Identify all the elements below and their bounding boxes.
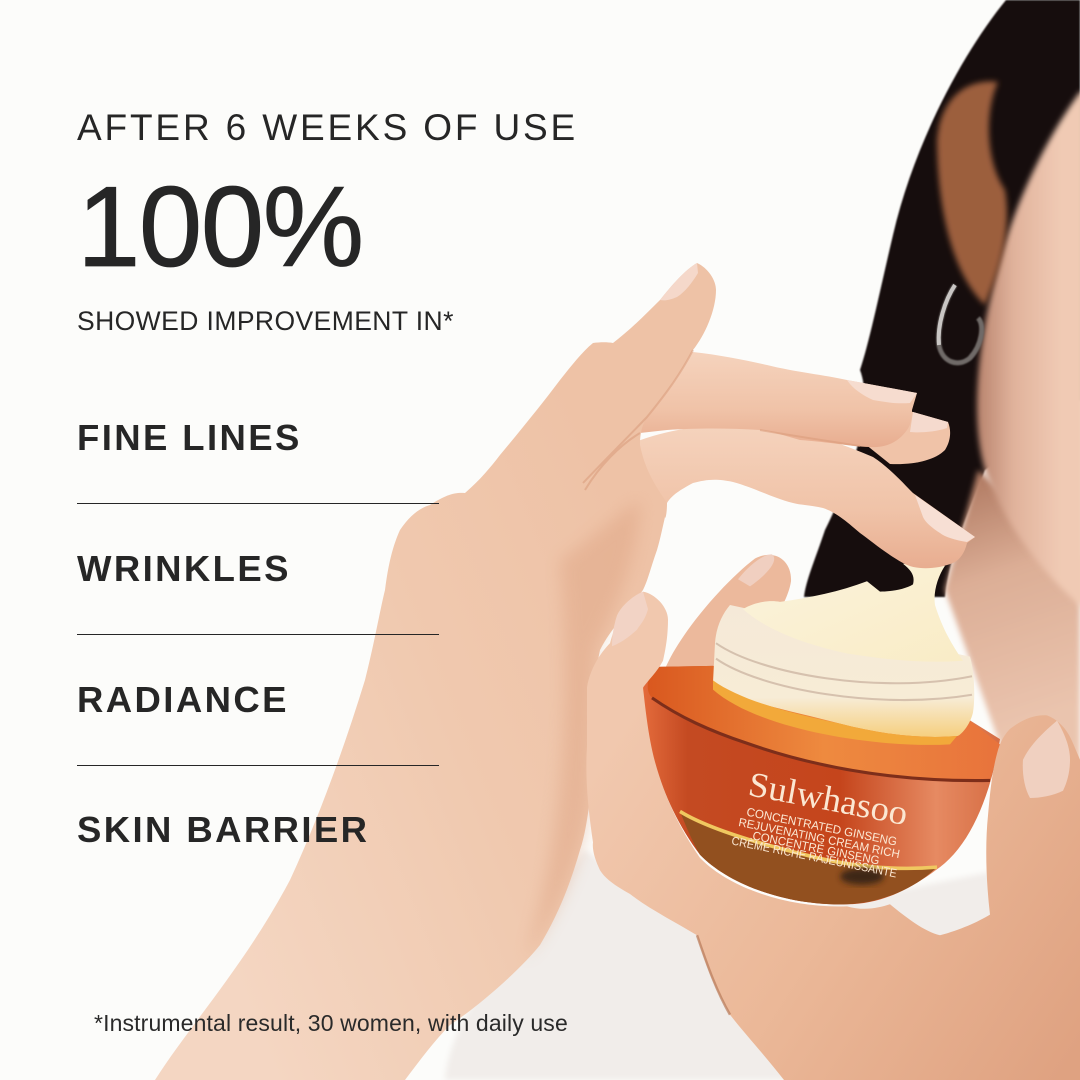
item: radiance: RADIANCE (77, 679, 289, 720)
nail: middle finger (847, 380, 917, 403)
jar label text: CONCENTRÉ GINSENG (751, 829, 881, 868)
jar label text: CRÈME RICHE RAJEUNISSANTE (730, 834, 898, 881)
palm shading (525, 500, 640, 960)
jar label text (730, 765, 911, 881)
item: wrinkles: WRINKLES (77, 548, 291, 589)
ring finger tip (860, 410, 950, 464)
nail: lower finger (915, 495, 975, 542)
heading: after 6 weeks of use: AFTER 6 WEEKS OF USE (77, 107, 578, 148)
jar ridge line (652, 698, 990, 781)
divider (77, 503, 439, 504)
nail: index finger (660, 263, 698, 300)
footnote: *Instrumental result, 30 women, with daily use (94, 1010, 568, 1036)
earring (939, 285, 982, 363)
ear (937, 82, 1007, 305)
list: improvement areas (77, 417, 439, 850)
nail: ring finger (910, 412, 948, 432)
lower hand crease (697, 935, 730, 1015)
item: fine lines: FINE LINES (77, 417, 302, 458)
holding hand (586, 592, 1080, 1080)
jar (643, 564, 1000, 904)
back finger of holding hand (665, 554, 791, 669)
lower finger (590, 424, 975, 568)
jar neck (713, 605, 974, 737)
jar label text: Sulwhasoo (746, 765, 911, 833)
jar label text: REJUVENATING CREAM RICH (737, 816, 901, 861)
nail: holding finger (612, 592, 648, 646)
palm and arm with index finger (155, 263, 716, 1080)
finger creases (583, 350, 860, 490)
big number: 100%: 100% (77, 164, 363, 291)
cream (743, 564, 963, 662)
jar glass body (643, 666, 1000, 904)
middle finger (640, 352, 917, 447)
item: skin barrier: SKIN BARRIER (77, 809, 369, 850)
jar label text: CONCENTRATED GINSENG (745, 806, 898, 849)
shirt (445, 850, 1005, 1080)
divider (77, 765, 439, 766)
hair (804, 0, 1080, 597)
jar shoulder (648, 666, 1000, 781)
neck (945, 470, 1080, 780)
face (977, 92, 1080, 610)
divider (77, 634, 439, 635)
left hand (155, 263, 975, 1080)
nail: thumb (1023, 721, 1070, 798)
subheading: SHOWED IMPROVEMENT IN* (77, 306, 454, 336)
amber base (680, 811, 937, 904)
